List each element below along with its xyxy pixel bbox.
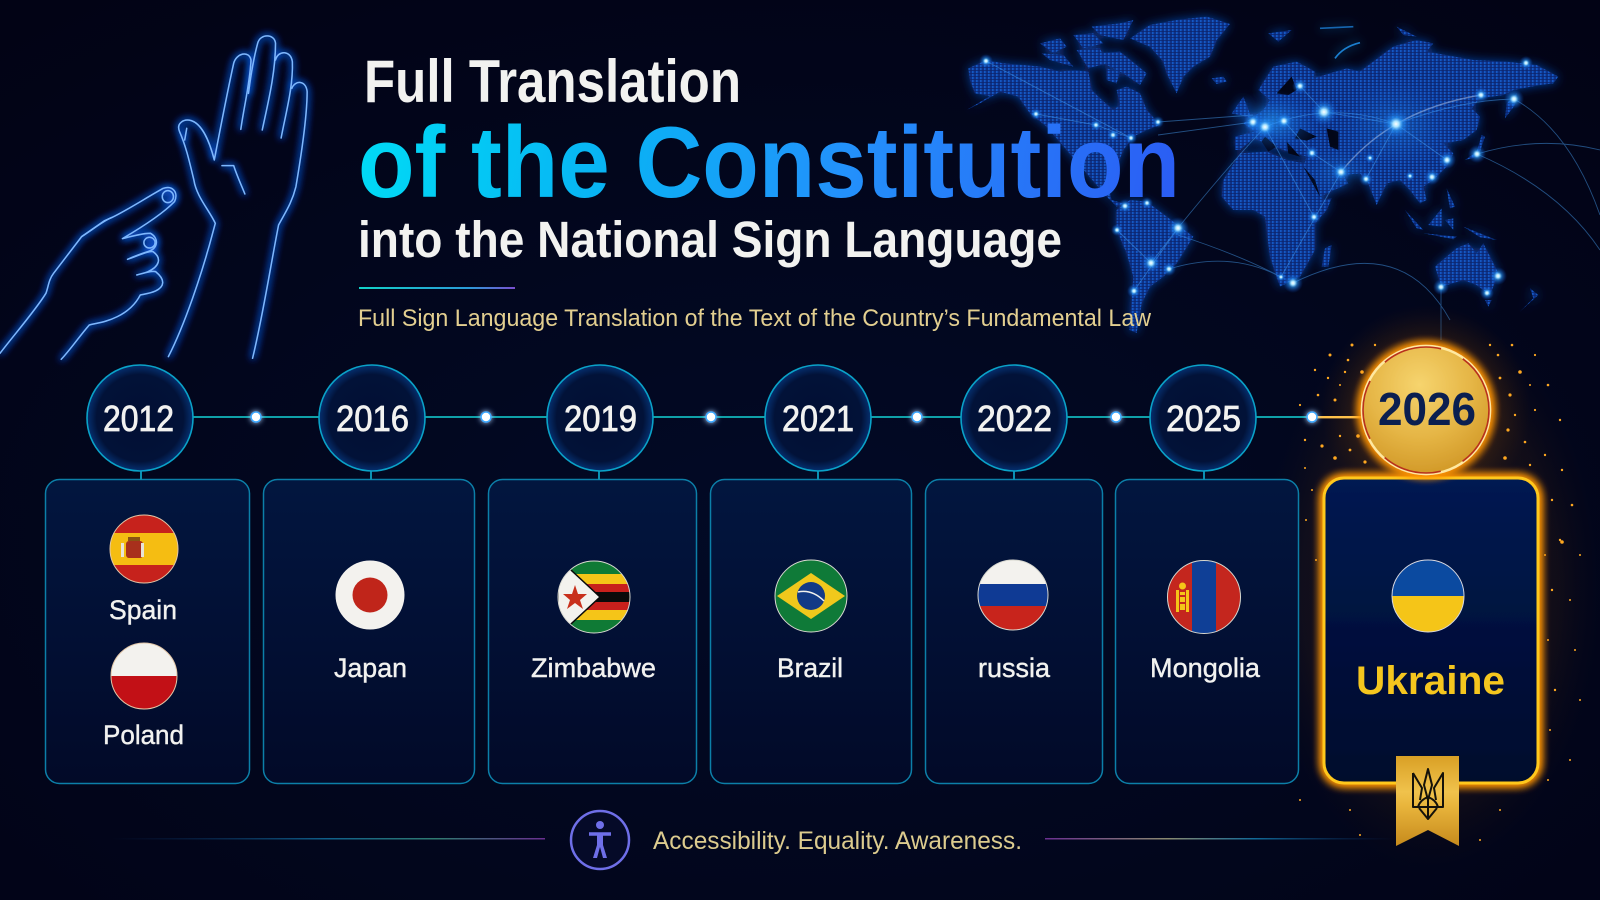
title line 2: of the Constitution — [358, 107, 1180, 219]
flag: Spain — [110, 515, 178, 583]
flag: Japan — [336, 560, 404, 630]
year badge 2016 — [319, 365, 425, 471]
year badge 2019: 2019 — [564, 398, 637, 439]
world map — [967, 17, 1600, 340]
title — [358, 48, 1180, 268]
timeline connector — [190, 412, 1366, 422]
panel: 2019 Zimbabwe — [488, 365, 696, 784]
year badge 2025: 2025 — [1166, 398, 1241, 439]
year badge 2022: 2022 — [977, 398, 1052, 439]
icon: neon signing hands — [0, 36, 307, 359]
panel: 2012 Spain and Poland — [46, 365, 250, 784]
panel: 2021 Brazil — [710, 365, 912, 784]
flag: Ukraine — [1392, 560, 1464, 632]
label: russia: russia — [978, 653, 1051, 683]
icon: accessibility — [571, 811, 629, 869]
panel: 2022 russia — [926, 365, 1102, 784]
label: Ukraine: Ukraine — [1356, 659, 1505, 703]
tagline: Accessibility. Equality. Awareness. — [653, 827, 1022, 855]
label: Poland: Poland — [103, 720, 184, 750]
footer divider lines — [110, 838, 1395, 840]
panel: 2026 Ukraine — [1324, 346, 1538, 846]
year badge 2012 — [87, 365, 193, 471]
year badge 2026: 2026 — [1378, 383, 1476, 435]
year badge 2021: 2021 — [782, 398, 854, 439]
year badge 2019 — [547, 365, 653, 471]
pointing hand — [0, 188, 176, 359]
flag: Brazil — [775, 560, 847, 632]
flag: Mongolia — [1167, 560, 1241, 634]
year badge 2025 — [1150, 365, 1256, 471]
title line 1: Full Translation — [364, 48, 741, 115]
flag: russia — [978, 560, 1048, 630]
year badge 2021 — [765, 365, 871, 471]
flag: Zimbabwe — [558, 558, 630, 636]
label: Brazil: Brazil — [777, 653, 843, 683]
raised open hand — [168, 36, 307, 358]
label: Spain: Spain — [109, 595, 177, 625]
ribbon with trident — [1396, 756, 1459, 846]
subtitle: Full Sign Language Translation of the Text of the Country’s Fundamental Law — [358, 305, 1152, 332]
label: Japan: Japan — [334, 653, 407, 683]
gold halo and sparkles — [1260, 305, 1600, 870]
panel: 2016 Japan — [264, 365, 474, 784]
label: Zimbabwe: Zimbabwe — [531, 653, 656, 683]
year badge 2016: 2016 — [336, 398, 409, 439]
label: Mongolia: Mongolia — [1150, 653, 1261, 683]
flag: Poland — [110, 642, 178, 710]
panel: 2025 Mongolia — [1116, 365, 1298, 784]
title line 3: into the National Sign Language — [358, 211, 1062, 268]
year badge 2012: 2012 — [103, 398, 174, 439]
year badge 2022 — [961, 365, 1067, 471]
year badge 2026 — [1362, 346, 1490, 474]
